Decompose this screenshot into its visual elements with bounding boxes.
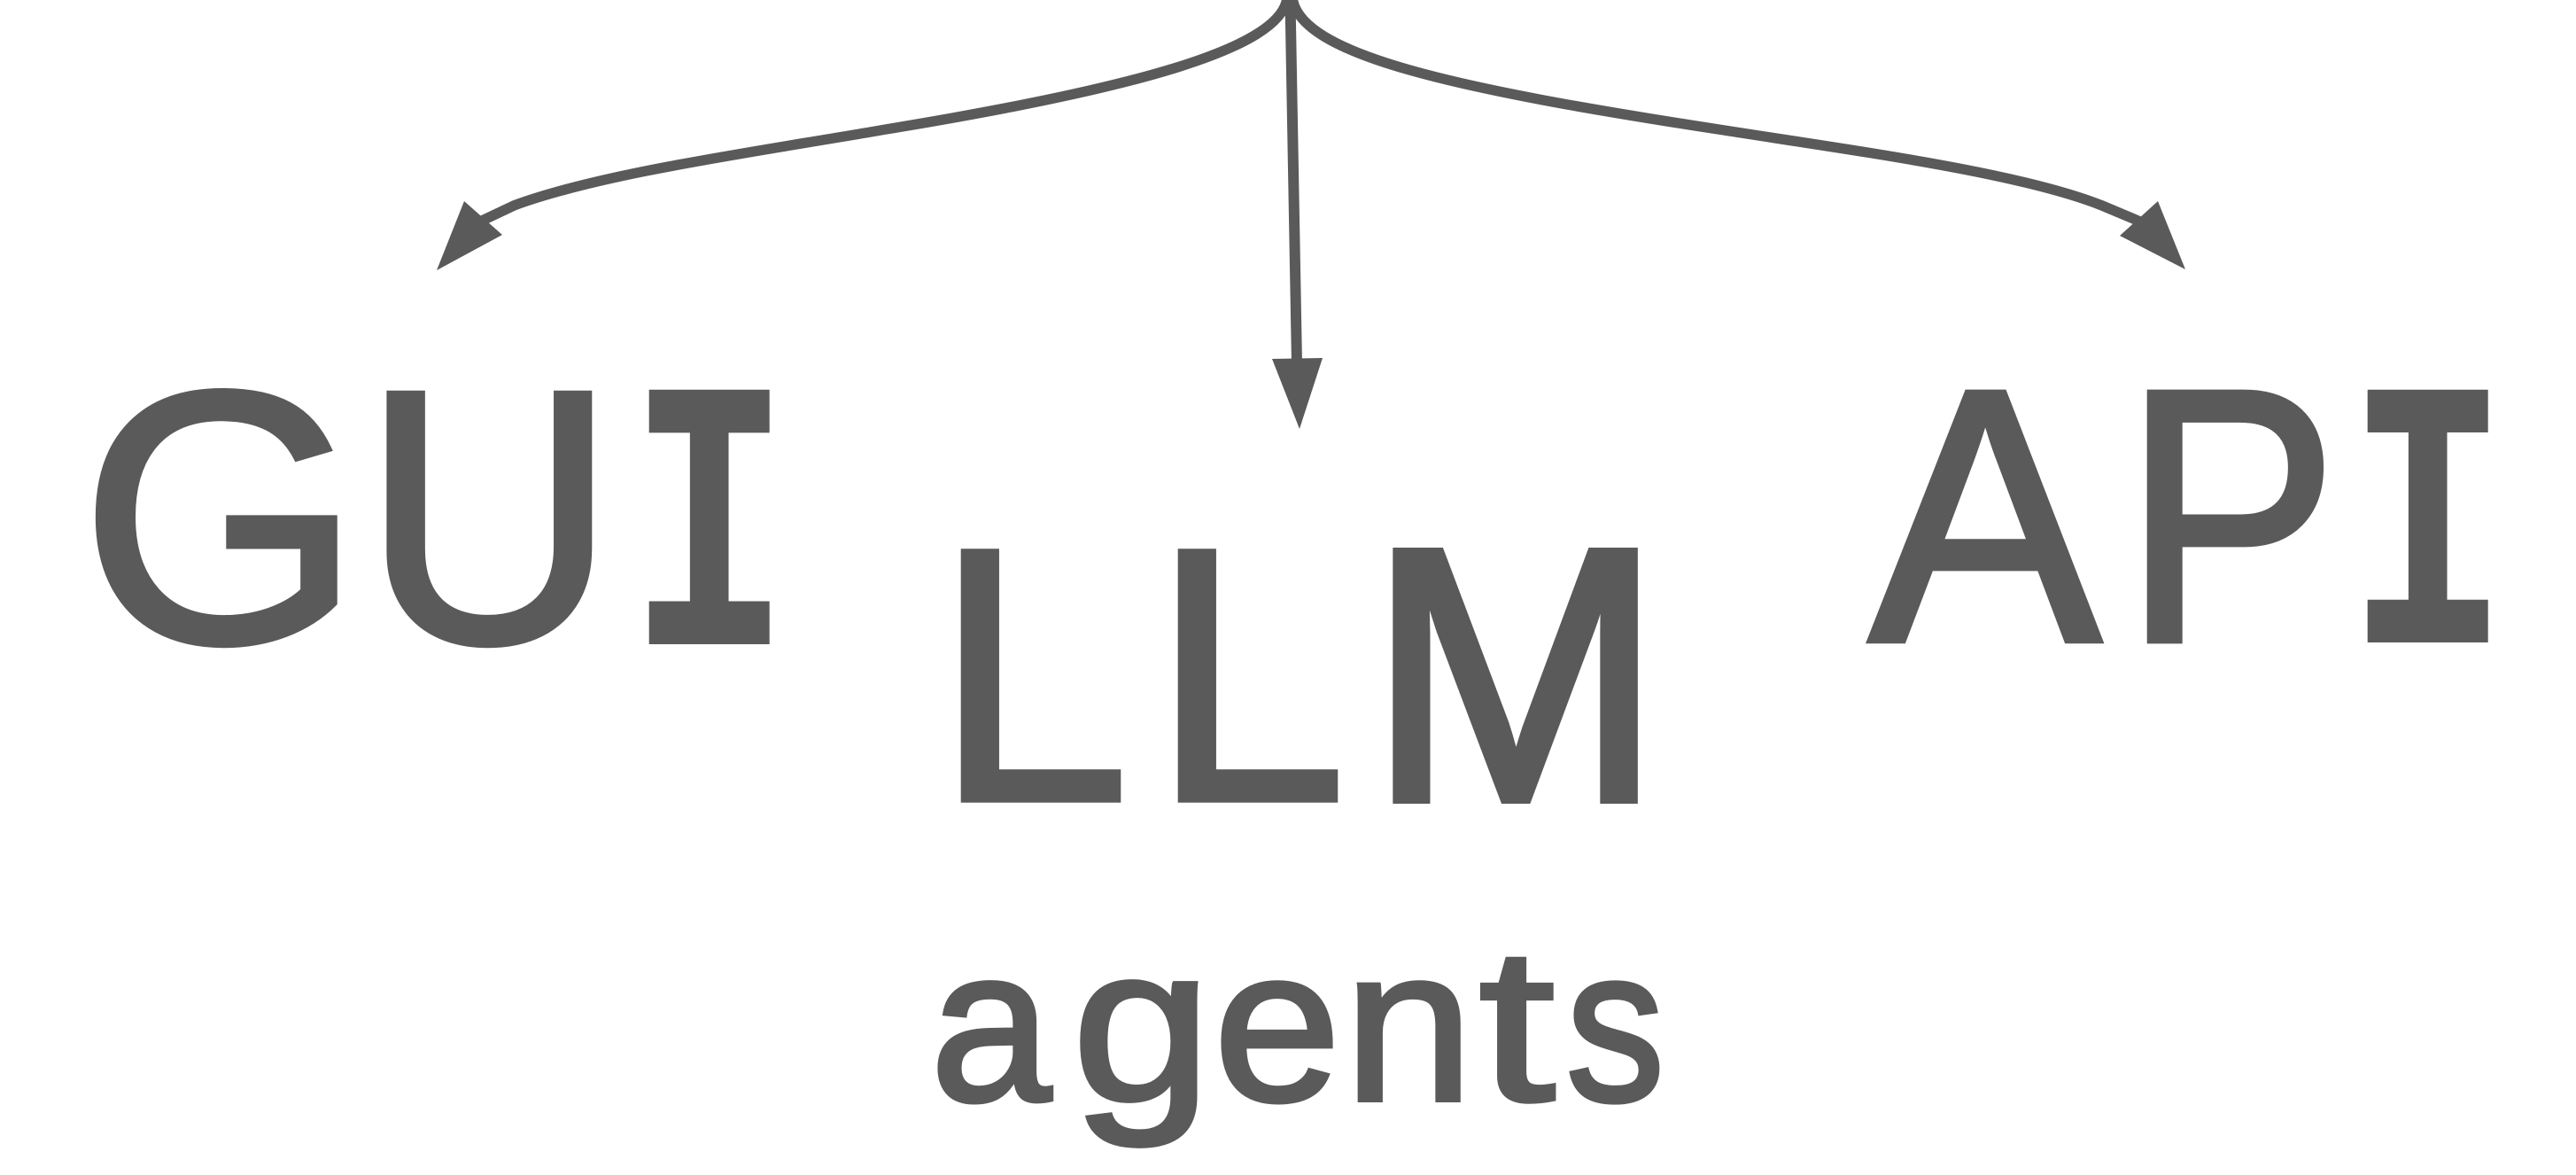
word: agents: e: [1214, 902, 1340, 1147]
word: GUI: I: [628, 323, 790, 760]
word: LLM: L: [1152, 473, 1346, 876]
word: LLM: L: [935, 473, 1129, 876]
word: agents: n: [1344, 903, 1473, 1148]
word: API: P: [2123, 315, 2338, 718]
word: API: I: [2347, 324, 2509, 759]
word: agents: g: [1072, 899, 1212, 1148]
word: agents: [930, 899, 1664, 1148]
word: GUI: U: [362, 316, 617, 719]
word: GUI: [81, 316, 790, 760]
word: agents: a: [930, 903, 1051, 1148]
word: LLM: [935, 473, 1663, 876]
word: agents: s: [1566, 902, 1664, 1147]
word: API: A: [1869, 314, 2102, 718]
word: GUI: G: [81, 317, 361, 719]
word: API: [1869, 314, 2509, 759]
arrow: to API: [1292, 0, 2185, 269]
arrow: to LLM: [1272, 0, 1323, 429]
arrow: to GUI: [437, 0, 1287, 270]
word: agents: t: [1478, 902, 1556, 1147]
word: LLM: M: [1368, 473, 1663, 876]
